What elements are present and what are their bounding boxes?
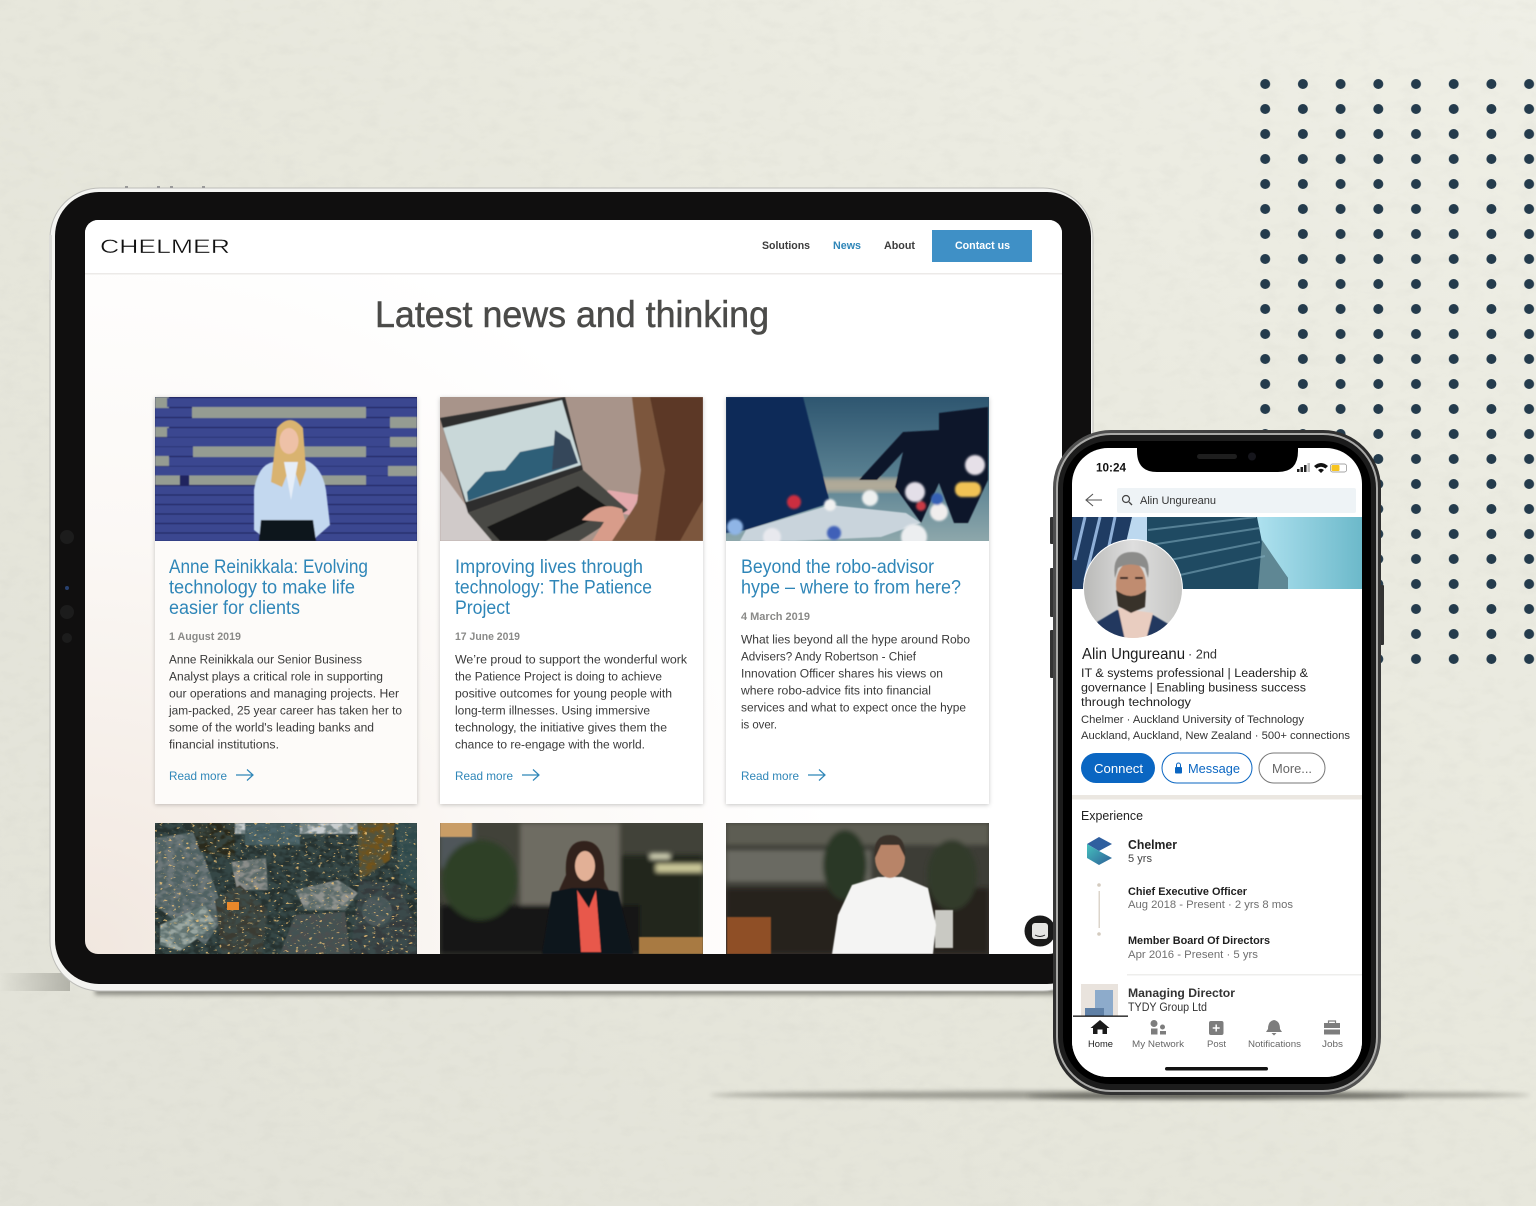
phone screen: [1072, 447, 1362, 1077]
article title: Anne Reinikkala: Evolving: [169, 557, 368, 578]
search bar: [1086, 488, 1356, 513]
tydy company logo: [1081, 984, 1118, 1017]
chelmer role group: Member Board Of Directors: [1128, 935, 1270, 947]
card: Anne Reinikkala: [155, 397, 417, 804]
read more link: Read more: [169, 769, 227, 783]
managing director role: [1128, 986, 1235, 1014]
logo: CHELMER: [100, 236, 230, 258]
article body: where robo-advice fits into financial: [740, 684, 931, 698]
article body: [455, 652, 688, 752]
status bar: [1096, 463, 1347, 473]
article body: long-term illnesses. Using immersive: [455, 704, 650, 718]
icon: jobs: [1324, 1021, 1340, 1034]
article title: [455, 557, 652, 619]
phone device: [1050, 430, 1384, 1095]
article body: is over.: [741, 718, 777, 732]
photo: laptop with video call: [440, 397, 703, 541]
tab labels: Jobs: [1322, 1039, 1344, 1049]
article title: hype – where to from here?: [741, 578, 961, 598]
chelmer role group: Chief Executive Officer: [1128, 886, 1248, 898]
photo: aerial city: [155, 823, 417, 954]
article body: What lies beyond all the hype around Robo: [741, 632, 970, 646]
article body: Advisers? Andy Robertson - Chief: [741, 650, 917, 664]
profile photo: [1083, 539, 1183, 640]
chelmer role group: Apr 2016 - Present · 5 yrs: [1128, 949, 1259, 961]
icon: post: [1209, 1021, 1224, 1035]
article body: technology, the initiative gives them the: [455, 720, 667, 734]
article title: [741, 557, 961, 598]
contact button: [932, 230, 1032, 262]
profile details: Auckland, Auckland, New Zealand · 500+ connections: [1081, 730, 1351, 742]
profile headline: [1081, 666, 1309, 709]
profile banner: [1072, 517, 1362, 589]
card: Patience Project: [440, 397, 703, 804]
icon: my network: [1150, 1020, 1166, 1034]
search bar: Alin Ungureanu: [1140, 495, 1216, 507]
page title: Latest news and thinking: [375, 294, 769, 335]
contact button: Contact us: [955, 240, 1010, 252]
article body: [168, 652, 402, 752]
chelmer role group: 5 yrs: [1128, 853, 1152, 865]
chelmer company logo: [1087, 837, 1112, 865]
nav links: [762, 240, 915, 252]
article title: Beyond the robo-advisor: [741, 557, 935, 578]
managing director role: Managing Director: [1128, 986, 1235, 1000]
article body: positive outcomes for young people with: [455, 686, 672, 700]
article body: [740, 632, 970, 732]
article body: Innovation Officer shares his views on: [741, 666, 943, 680]
chat widget icon: [1024, 916, 1056, 946]
profile headline: IT & systems professional | Leadership &: [1081, 666, 1309, 680]
article body: jam-packed, 25 year career has taken her to: [168, 704, 402, 718]
experience heading: Experience: [1081, 809, 1143, 823]
photo: woman against blue slats: [155, 397, 417, 541]
article body: chance to re-engage with the world.: [455, 738, 645, 752]
article body: Analyst plays a critical role in supporting: [169, 670, 383, 684]
profile headline: through technology: [1081, 695, 1192, 709]
notch: [1137, 447, 1298, 472]
card: robo-advisor: [726, 397, 989, 804]
nav links: News: [833, 240, 861, 252]
dot grid decoration: [1246, 72, 1536, 672]
article title: technology: The Patience: [455, 578, 652, 598]
tablet body: [49, 186, 1093, 991]
chelmer role group: Chelmer: [1128, 838, 1177, 852]
article title: [169, 557, 368, 619]
article title: Project: [455, 598, 511, 619]
tab labels: My Network: [1132, 1039, 1185, 1049]
article date: 1 August 2019: [169, 631, 241, 643]
tab labels: Notifications: [1248, 1039, 1302, 1049]
managing director role: TYDY Group Ltd: [1128, 1002, 1207, 1014]
article body: our operations and managing projects. Her: [169, 686, 399, 700]
more button: [1259, 753, 1325, 783]
photo: woman in office: [440, 822, 703, 954]
tablet shadow: [0, 973, 1060, 995]
navigation bar: [85, 220, 1062, 274]
read more link: Read more: [455, 769, 513, 783]
article title: Improving lives through: [455, 557, 643, 578]
tab labels: [1088, 1040, 1343, 1049]
article body: financial institutions.: [169, 738, 279, 752]
photo: man in office: [726, 823, 989, 954]
profile details: Chelmer · Auckland University of Technology: [1081, 714, 1304, 726]
article title: technology to make life: [169, 578, 355, 598]
profile name: Alin Ungureanu: [1082, 646, 1185, 663]
nav links: Solutions: [762, 240, 810, 252]
chelmer role group: Aug 2018 - Present · 2 yrs 8 mos: [1128, 899, 1293, 911]
article date: 17 June 2019: [455, 631, 520, 643]
photo: robot hand on laptop: [726, 397, 989, 550]
profile name: · 2nd: [1188, 648, 1217, 662]
article body: some of the world's leading banks and: [169, 720, 374, 734]
article body: the Patience Project is doing to achieve: [455, 670, 662, 684]
tablet screen: [85, 220, 1062, 954]
tab labels: Home: [1088, 1039, 1113, 1049]
read more link: Read more: [741, 769, 799, 783]
phone hardware: [1050, 430, 1384, 1095]
message button: [1162, 753, 1252, 783]
profile details: [1081, 714, 1351, 742]
connect button: Connect: [1094, 762, 1144, 776]
icon: notifications: [1266, 1020, 1282, 1036]
more button: More...: [1272, 762, 1312, 776]
status bar: 10:24: [1096, 460, 1126, 474]
icon: home: [1090, 1020, 1110, 1034]
profile headline: governance | Enabling business success: [1081, 680, 1306, 694]
home indicator: [1165, 1067, 1268, 1070]
article body: services and what to expect once the hype: [741, 700, 966, 714]
tab labels: Post: [1207, 1039, 1227, 1049]
bottom tab bar: [1072, 1016, 1362, 1077]
article body: We’re proud to support the wonderful work: [455, 652, 688, 666]
article title: easier for clients: [169, 598, 300, 619]
tablet device: [49, 186, 1093, 991]
article date: 4 March 2019: [741, 611, 810, 623]
phone shadow: [710, 1091, 1530, 1099]
connect button: [1081, 753, 1155, 783]
nav links: About: [884, 240, 915, 252]
message button: Message: [1188, 762, 1240, 776]
chelmer role group: [1097, 838, 1293, 961]
article body: Anne Reinikkala our Senior Business: [169, 652, 362, 666]
